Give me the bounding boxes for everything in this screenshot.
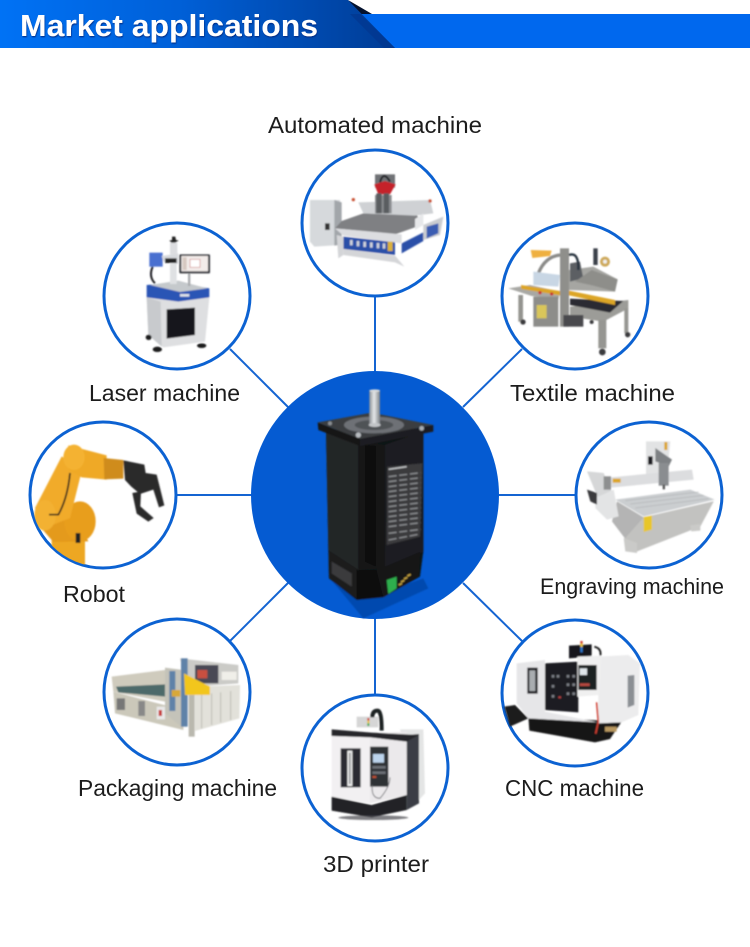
application: Engraving machine [540, 422, 724, 599]
header banner [0, 0, 750, 48]
label: Textile machine [510, 380, 675, 406]
connector lines [176, 295, 576, 695]
title: Market applications [20, 8, 318, 43]
application: CNC machine [502, 620, 648, 801]
label: Automated machine [268, 112, 482, 138]
application: Automated machine [268, 112, 482, 296]
icon: laser marking machine [146, 237, 210, 352]
application: 3D printer [302, 695, 448, 877]
icon: CNC machining center [504, 641, 640, 742]
icon: integrated stepper motor [318, 389, 433, 618]
icon: robot arm [34, 445, 164, 568]
label: Engraving machine [540, 574, 724, 599]
label: Robot [63, 581, 126, 607]
icon: textile carton machine [508, 248, 630, 355]
label: 3D printer [323, 851, 429, 877]
application: Laser machine [89, 223, 250, 406]
label: CNC machine [505, 775, 644, 801]
icon: automated CNC router [310, 174, 443, 267]
application: Textile machine [502, 223, 675, 406]
label: Laser machine [89, 380, 240, 406]
icon: engraving machine [587, 441, 715, 553]
central motor disc [251, 371, 499, 619]
label: Packaging machine [78, 775, 277, 801]
application: Packaging machine [78, 619, 277, 801]
icon: packaging machine [112, 658, 240, 737]
application: Robot [30, 422, 176, 607]
icon: 3D printer cabinet [332, 711, 425, 820]
